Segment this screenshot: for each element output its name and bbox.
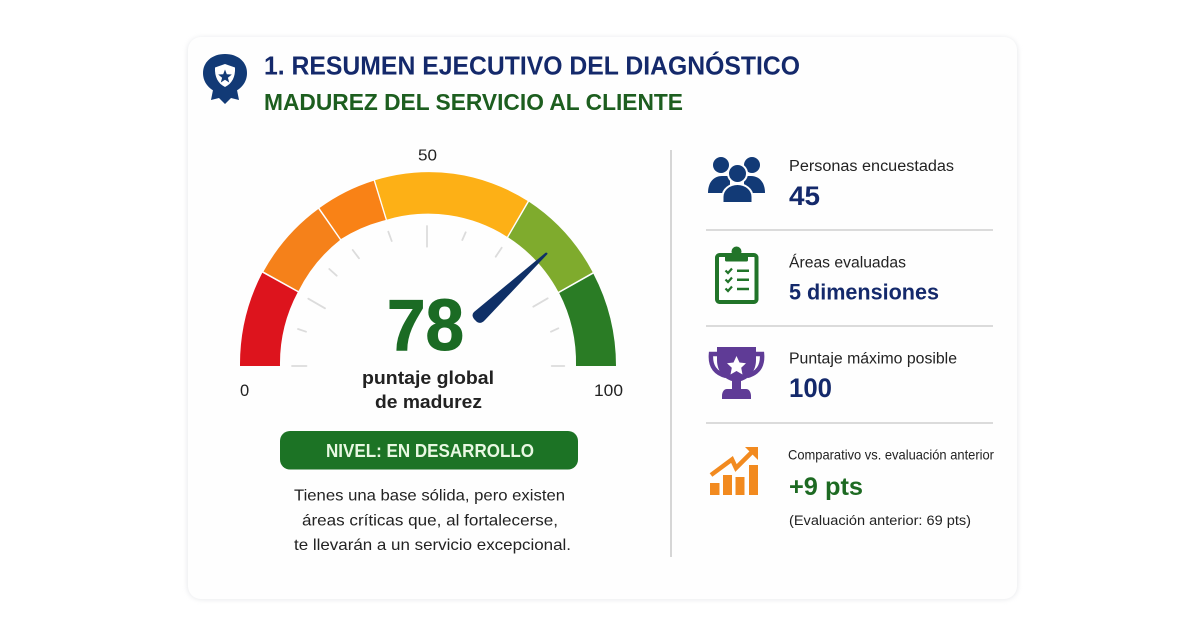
score caption: [362, 367, 494, 412]
stat: comparativo: [710, 446, 994, 528]
value: +9 pts: [789, 473, 863, 501]
gauge segment: orange low: [264, 209, 340, 291]
gauge segment: light green: [508, 202, 593, 292]
icon: people: [708, 157, 765, 203]
value: 100: [789, 373, 832, 403]
gauge segment: yellow: [375, 172, 528, 237]
level pill: NIVEL: EN DESARROLLO: [326, 441, 534, 461]
gauge segment: orange mid: [320, 181, 386, 239]
label: Comparativo vs. evaluación anterior: [788, 446, 994, 462]
stat: puntaje maximo: [711, 347, 957, 403]
description text: te llevarán a un servicio excepcional.: [294, 537, 571, 554]
level pill: [280, 431, 578, 470]
icon: clipboard: [717, 246, 756, 302]
gauge label: 0: 0: [240, 382, 249, 400]
value: 45: [789, 181, 820, 211]
gauge segment: red: [240, 273, 298, 366]
gauge needle: [472, 253, 548, 323]
label: Puntaje máximo posible: [789, 350, 957, 368]
label: Personas encuestadas: [789, 158, 954, 175]
stat: personas encuestadas: [708, 157, 954, 211]
icon: growth chart: [710, 447, 758, 495]
value: 5 dimensiones: [789, 280, 939, 304]
gauge segment: green: [559, 274, 616, 366]
icon: trophy: [711, 347, 762, 399]
title: 1. RESUMEN EJECUTIVO DEL DIAGNÓSTICO: [264, 50, 800, 80]
panel: card: [187, 37, 1018, 600]
gauge label: 50: 50: [418, 148, 437, 164]
description text: Tienes una base sólida, pero existen: [294, 488, 565, 504]
subtitle: MADUREZ DEL SERVICIO AL CLIENTE: [264, 89, 683, 115]
gauge label: 100: 100: [594, 382, 623, 400]
score caption: de madurez: [375, 391, 482, 412]
stat: areas evaluadas: [717, 246, 939, 304]
score value: 78: [387, 286, 464, 366]
description text: [294, 488, 571, 554]
icon: badge: [203, 54, 247, 104]
note: (Evaluación anterior: 69 pts): [789, 513, 971, 528]
score caption: puntaje global: [362, 367, 494, 388]
description text: áreas críticas que, al fortalecerse,: [302, 512, 558, 530]
label: Áreas evaluadas: [789, 254, 906, 272]
chart: gauge: [240, 172, 616, 366]
gauge ticks: [292, 226, 564, 366]
